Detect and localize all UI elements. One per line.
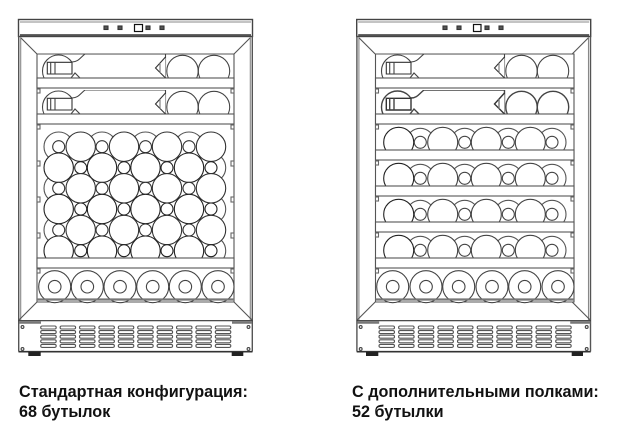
feet <box>366 352 583 356</box>
shelf bars <box>376 78 574 268</box>
shelf support tabs <box>37 89 234 273</box>
wine shelf 1 with bottle <box>380 54 570 78</box>
caption: standard configuration <box>19 383 248 421</box>
extra shelf row 3 <box>383 198 567 222</box>
bottom row of bottles <box>39 271 234 303</box>
extra shelf row 2 <box>383 162 567 186</box>
shelf bars <box>37 78 234 268</box>
stacked bottle honeycomb <box>44 132 226 265</box>
control panel icons <box>104 24 164 32</box>
cabinet shell <box>357 20 591 352</box>
extra shelf row 1 <box>383 126 567 150</box>
extra shelf row 4 <box>383 234 567 258</box>
wine shelf 2 with bottle <box>380 90 570 114</box>
bottom row of bottles <box>377 271 574 303</box>
ventilation grille <box>379 326 571 347</box>
caption: standard configuration: Стандартная конфигурация: <box>19 383 248 401</box>
ventilation grille <box>41 326 231 347</box>
cabinet shell <box>18 20 252 352</box>
interior outline <box>376 54 574 302</box>
bottom shelf <box>37 298 234 301</box>
panel: standard configuration cabinet <box>18 20 252 356</box>
bottom shelf <box>376 298 574 301</box>
wine shelf 1 with bottle <box>42 54 230 78</box>
shelf support tabs <box>376 89 574 273</box>
caption: extra shelves: 52 бутылки <box>352 403 444 421</box>
control panel icons <box>443 24 503 32</box>
wine shelf 2 with bottle <box>42 90 230 114</box>
panel: extra shelves cabinet <box>357 20 591 356</box>
feet <box>28 352 243 356</box>
caption: extra shelves: С дополнительными полками: <box>352 383 599 401</box>
caption: standard configuration: 68 бутылок <box>19 403 110 421</box>
caption: extra shelves <box>352 383 599 421</box>
interior outline <box>37 54 234 302</box>
